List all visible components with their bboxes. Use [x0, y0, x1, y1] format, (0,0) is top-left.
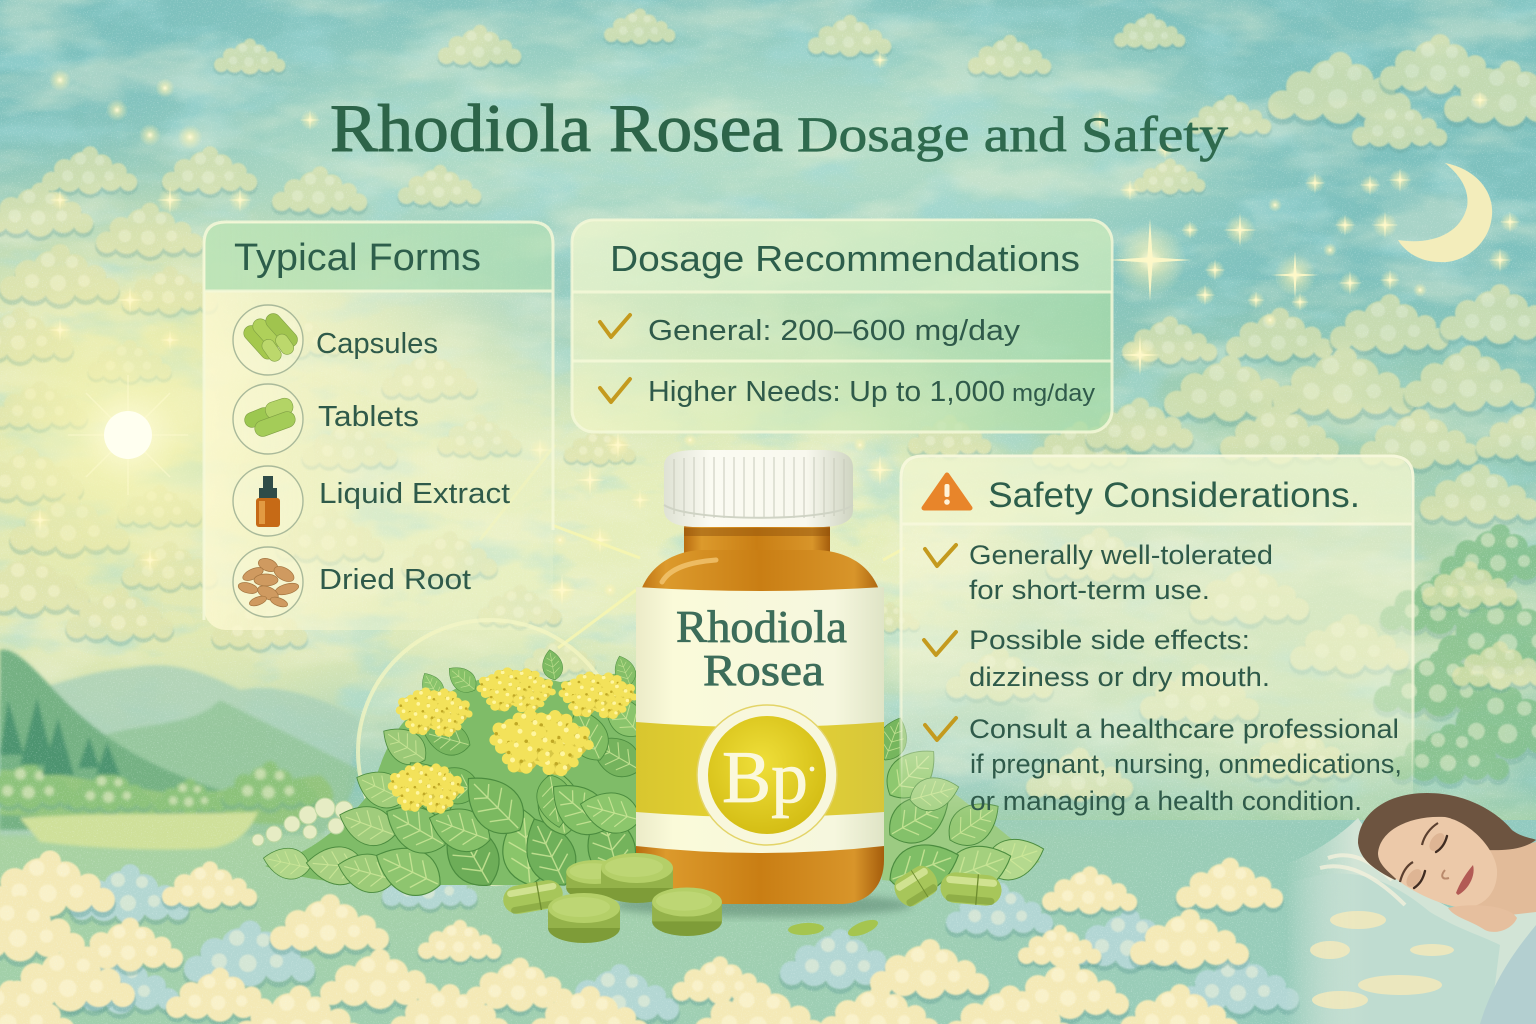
title: Rhodiola Rosea [330, 90, 783, 166]
row: higher needs dose: Higher Needs: Up to 1,000 [648, 376, 1005, 408]
icon: warning triangle [924, 475, 970, 508]
item: consult a professional [925, 714, 1402, 816]
heading: typical forms: Typical Forms [234, 237, 481, 279]
item: liquid extract [233, 466, 510, 536]
brand badge: Bp [722, 737, 808, 819]
top tablet [601, 853, 673, 903]
capsule right angled [889, 861, 943, 911]
heading: safety considerations: Safety Considerations. [988, 476, 1360, 515]
item: generally well tolerated [925, 540, 1273, 605]
closed eye upper [1436, 836, 1447, 852]
yellow label band [636, 722, 884, 817]
lips [1456, 865, 1474, 895]
label: liquid extract: Liquid Extract [319, 478, 510, 510]
flower clusters [388, 667, 638, 814]
bottle cap [664, 450, 853, 527]
panel background [204, 222, 553, 630]
label text: rhodiola rosea: Rhodiola [676, 601, 847, 652]
item: capsules [233, 305, 438, 375]
eyelids [1426, 830, 1448, 854]
heading: dosage recommendations: Dosage Recommendations [610, 238, 1080, 279]
item: dried root [233, 547, 471, 617]
row: higher needs dose: mg/day [1012, 380, 1095, 407]
panel header band [903, 458, 1411, 524]
label: dried root: Dried Root [319, 564, 471, 596]
back tablet [566, 860, 624, 900]
sun [0, 265, 298, 605]
item: tablets [233, 384, 419, 454]
item: consult a professional: or managing a health condition. [970, 786, 1362, 816]
title [330, 90, 1228, 166]
label: tablets: Tablets [318, 401, 419, 433]
plant: glowing halo circle [358, 620, 622, 884]
panel: safety considerations [901, 456, 1413, 825]
nose [1442, 870, 1449, 879]
closed eye lower [1414, 871, 1425, 888]
panel header band [205, 223, 552, 291]
seed right [846, 916, 880, 940]
brand badge [697, 705, 837, 845]
hair [1358, 793, 1536, 880]
crescent moon [1398, 163, 1492, 262]
title: Dosage and Safety [797, 106, 1228, 162]
seed left [788, 922, 824, 936]
front left tablet [548, 893, 620, 943]
panel: dosage recommendations [572, 220, 1112, 432]
bottle neck [684, 522, 830, 562]
background: sky cloud clusters [0, 8, 1536, 806]
glow lines linking panels to bottle [480, 445, 905, 648]
arm [1448, 905, 1517, 932]
panel header band [574, 222, 1110, 292]
face [1378, 817, 1497, 908]
panel background [901, 456, 1413, 825]
label text: rhodiola rosea [676, 601, 847, 695]
bottle body [636, 550, 884, 904]
sparkle stars [27, 50, 1521, 606]
bottle shadow [612, 893, 912, 917]
leaves: right mound [871, 713, 1050, 902]
label: capsules: Capsules [316, 328, 438, 360]
background: right forested hills [1373, 524, 1536, 789]
row: higher needs dose [600, 376, 1095, 408]
plant: rhodiola leaves and flowers [252, 648, 1050, 905]
label text: rhodiola rosea: Rosea [703, 646, 824, 695]
bottle label [636, 587, 884, 853]
pills in the foreground [501, 853, 1003, 943]
item: consult a professional: if pregnant, nursing, onmedications, [970, 749, 1402, 779]
front right tablet [652, 887, 722, 936]
background: left valley landscape [0, 650, 360, 850]
sleeping woman [1285, 793, 1536, 1024]
item: consult a professional: Consult a healthcare professional [969, 714, 1399, 744]
panel: typical forms [204, 222, 553, 630]
eyebrows [1400, 823, 1438, 882]
item: possible side effects [924, 625, 1270, 692]
pillow and blanket [1285, 818, 1536, 1024]
blanket fold [1480, 925, 1536, 1024]
item: possible side effects: dizziness or dry mouth. [969, 662, 1270, 692]
cream blossoms on left tail [252, 798, 353, 846]
panel background [572, 220, 1112, 432]
item: possible side effects: Possible side effects: [969, 625, 1250, 655]
bottle [612, 450, 912, 917]
neck and shoulder [1470, 840, 1536, 915]
capsule right flat [939, 871, 1003, 907]
capsule left [501, 878, 565, 916]
background: foreground cloud fields [0, 850, 1300, 1024]
leaves: left mound [260, 648, 652, 905]
item: generally well tolerated: for short-term use. [969, 575, 1210, 605]
item: generally well tolerated: Generally well-tolerated [969, 540, 1273, 570]
row: general dose: General: 200–600 mg/day [648, 315, 1021, 347]
foliage base [265, 670, 640, 885]
